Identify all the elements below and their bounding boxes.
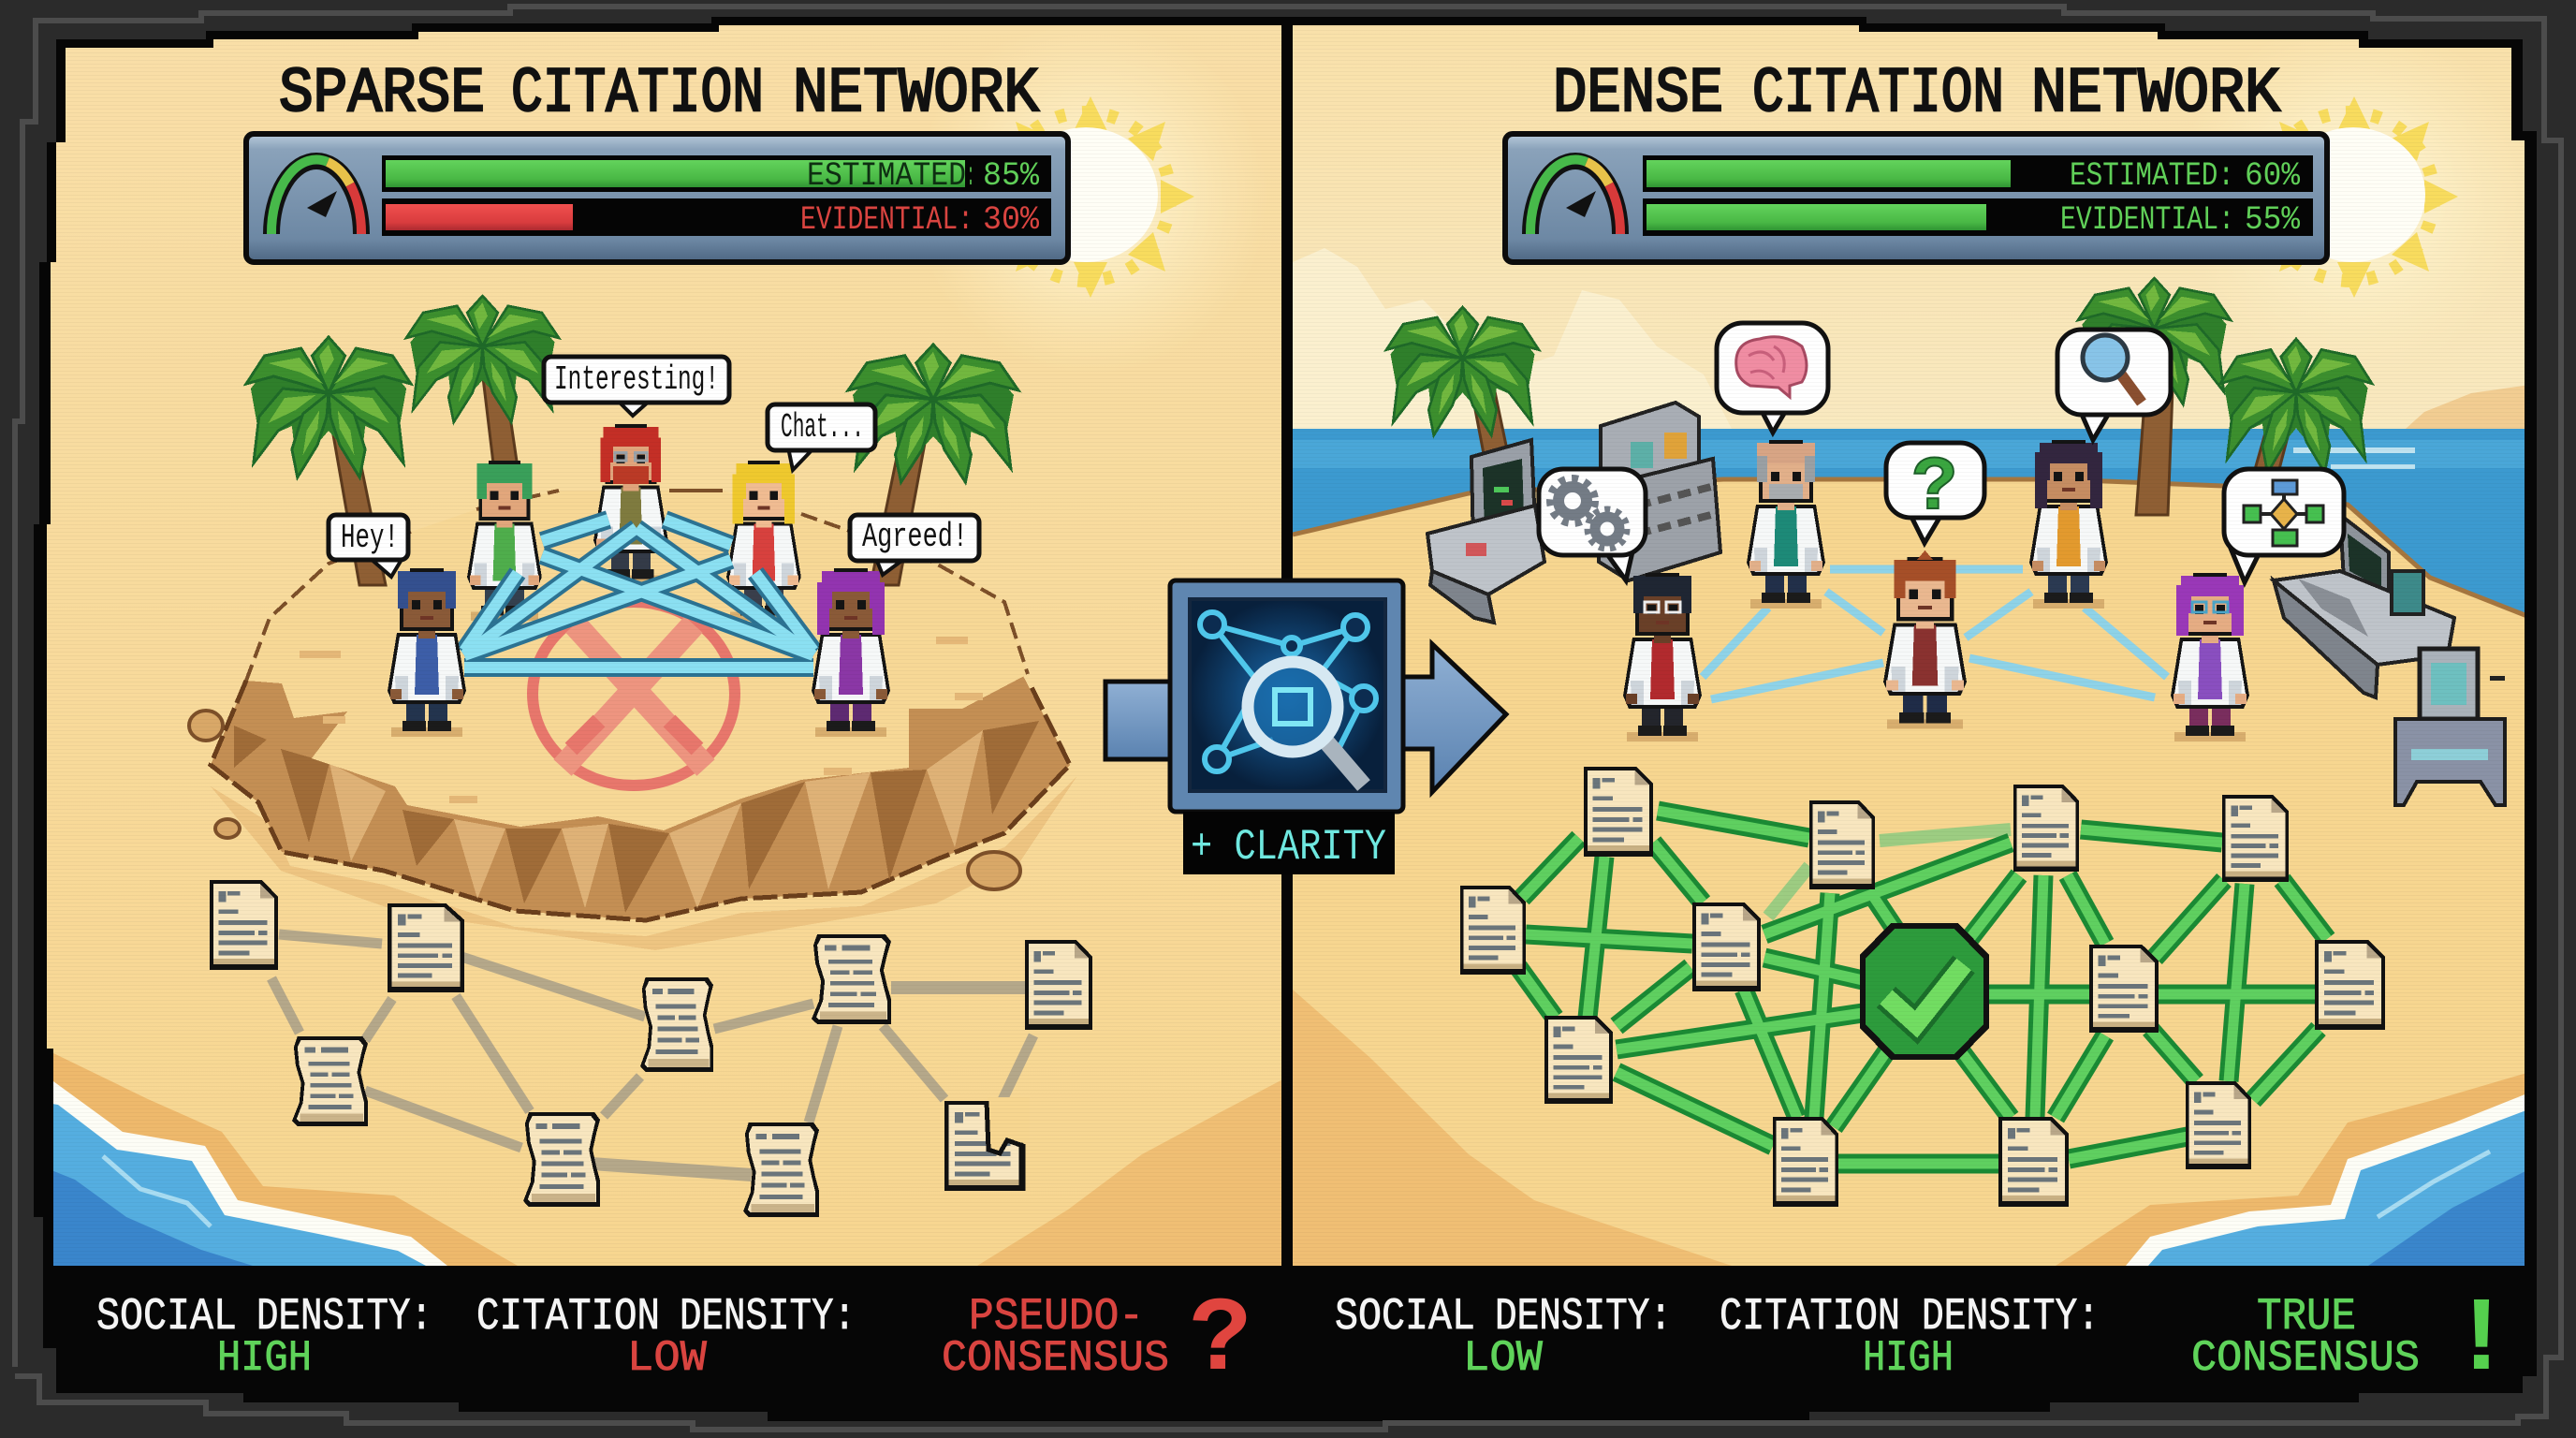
icon bubble: flowchart (2224, 469, 2344, 582)
bar: estimated: : (967, 157, 974, 195)
island with cliffs (211, 491, 1076, 950)
heading: sparse: CITATION (511, 58, 764, 130)
citation density: HIGH (1863, 1334, 1954, 1383)
verdict: true consensus (2191, 1292, 2420, 1383)
bar: evidential (1643, 198, 2313, 239)
verdict: pseudo-consensus (942, 1292, 1169, 1383)
speech bubble: Chat... (768, 404, 875, 470)
citation density (476, 1292, 856, 1383)
lab computer desk right (2274, 515, 2454, 697)
scroll 4 (640, 977, 713, 1072)
verdict: pseudo-consensus: PSEUDO- (969, 1292, 1144, 1343)
document 1 (1584, 767, 1653, 857)
speech bubble: Interesting!: Interesting! (554, 360, 719, 399)
document 8 (2315, 940, 2385, 1030)
icon bubble: question mark (1886, 443, 1984, 543)
social density: DENSITY: (1495, 1292, 1672, 1343)
thick green citation links (1518, 811, 2327, 1164)
heading: dense: CITATION (1752, 58, 2004, 130)
heading: sparse: SPARSE (279, 58, 485, 130)
left water (28, 1100, 426, 1266)
bar: evidential: 30% (983, 201, 1040, 239)
sun: right panel (2176, 19, 2532, 374)
icon: red question mark: ? (1189, 1282, 1252, 1401)
clarity arrow and icon (1105, 580, 1506, 874)
icon bubble: gears (1539, 469, 1646, 580)
scroll 3 (292, 1036, 368, 1126)
document 2 (1809, 800, 1875, 889)
gauge (1530, 160, 1620, 234)
icon: magnifier over network (1170, 580, 1403, 812)
bar: estimated: ESTIMATED: (2070, 157, 2234, 195)
document 3 (2013, 785, 2079, 872)
verdict: true consensus: CONSENSUS (2191, 1334, 2420, 1383)
icon: flowchart (2244, 480, 2323, 546)
red crossed-out emblem on island (533, 602, 735, 785)
palm tree 2 (406, 296, 559, 487)
dark sand bottom right (2056, 1067, 2546, 1266)
citation density: LOW (627, 1334, 707, 1383)
scientist: purple hair, glasses (2171, 573, 2249, 741)
status bar: sparse (96, 1282, 1252, 1401)
scientist: purple hair (812, 568, 890, 737)
right water ripples (2378, 1152, 2490, 1217)
icon: brain (1736, 337, 1807, 397)
bar: estimated: 60% (2245, 157, 2301, 195)
heading: dense: NETWORK (2031, 58, 2280, 130)
bar: evidential: 55% (2245, 201, 2301, 239)
icon bubble: brain (1717, 323, 1828, 433)
bar: evidential: EVIDENTIAL: (2060, 201, 2234, 239)
speech bubble: Agreed!: Agreed! (862, 518, 968, 556)
sea (1293, 429, 2552, 635)
social density: DENSITY: (256, 1292, 432, 1343)
speech bubble: Interesting! (544, 357, 729, 416)
left deep water (28, 1161, 253, 1266)
right deep water (2368, 1161, 2546, 1266)
paper 1 (210, 880, 278, 970)
citation density: CITATION (1720, 1292, 1900, 1343)
dark sand band around left water (28, 1051, 518, 1266)
social density (1335, 1292, 1672, 1383)
arrow head (1401, 644, 1506, 792)
palm tree 1 (246, 337, 411, 585)
verdict: pseudo-consensus: CONSENSUS (942, 1334, 1169, 1383)
palm tree 3 (848, 345, 1018, 585)
social links: dense cyan connections (464, 520, 813, 668)
torn paper 9 (944, 1097, 1030, 1191)
scientist: centre, brown spiky hair (1883, 550, 1967, 729)
verification check badge (1860, 923, 1989, 1060)
scientist: blonde hair (726, 461, 801, 621)
document 5 (1460, 886, 1526, 975)
scientist: dark skin, glasses (1623, 573, 1702, 741)
scientist: blue hair (388, 568, 466, 737)
heading: dense: DENSE (1553, 58, 1723, 130)
speech bubble: Chat...: Chat... (781, 408, 864, 447)
citation density: DENSITY: (680, 1292, 856, 1343)
clarity label: + CLARITY (1191, 823, 1386, 872)
citation density: DENSITY: (1922, 1292, 2100, 1343)
icon: gears (1550, 478, 1627, 549)
scroll 5 (812, 934, 891, 1024)
scientist: dark hair, orange shirt (2029, 440, 2108, 609)
social density: SOCIAL (1335, 1292, 1475, 1343)
speech bubble: Agreed! (850, 515, 979, 575)
beach (1293, 479, 2537, 1273)
palm tree 4 (1386, 307, 1539, 459)
rocks beside island (189, 711, 1020, 889)
faded links (1768, 829, 2011, 917)
dark sand corner bottom right (977, 1077, 1288, 1266)
social density: SOCIAL (96, 1292, 237, 1343)
scientist: older grey hair (1747, 440, 1825, 609)
palm tree 5 (2078, 278, 2231, 515)
paper 6 (1025, 940, 1092, 1030)
bar: estimated (382, 155, 1051, 195)
social density: LOW (1463, 1334, 1543, 1383)
weak social links, pale blue (1703, 569, 2167, 699)
gauge (271, 160, 361, 234)
icon: green exclamation mark: ! (2450, 1282, 2513, 1401)
speech bubble: Hey! (329, 515, 408, 577)
citation density (1720, 1292, 2100, 1383)
sea highlight (2293, 448, 2415, 453)
social density (96, 1292, 432, 1383)
icon bubble: magnifier (2057, 330, 2171, 440)
arrow tail (1105, 682, 1173, 759)
document 9 (1544, 1016, 1613, 1104)
consensus meter panel: dense (1505, 134, 2327, 262)
document 6 (1692, 902, 1761, 991)
bar: estimated (1643, 155, 2313, 195)
heading: sparse: NETWORK (793, 58, 1039, 130)
document 4 (2222, 795, 2289, 882)
document 12 (2186, 1081, 2251, 1169)
clarity label (1183, 812, 1395, 874)
palm tree 6 (2220, 339, 2372, 473)
icon bubble: question mark: ? (1911, 445, 1958, 532)
social density: HIGH (217, 1334, 312, 1383)
dark sand bottom left (1293, 990, 1732, 1266)
speech bubble: Hey!: Hey! (341, 519, 399, 557)
heading: dense (1553, 58, 2280, 130)
heading: sparse (279, 58, 1039, 130)
bar: estimated: ESTIMATED (807, 157, 966, 195)
dense citation network (1460, 767, 2385, 1207)
left water foam (28, 1077, 447, 1266)
scroll 8 (743, 1123, 819, 1217)
sun: left panel (913, 19, 1268, 374)
small lab device (2395, 649, 2505, 805)
left panel: sand background (28, 0, 1288, 1273)
bar: evidential (382, 198, 1051, 239)
lab server machine (1599, 403, 1720, 580)
right water foam (2126, 1086, 2546, 1266)
sea lighter band (1293, 440, 2552, 468)
right water (2148, 1103, 2546, 1266)
sparse grey links (271, 934, 1033, 1175)
paper 2 (388, 903, 464, 992)
far sand dune (2406, 384, 2537, 429)
citation density: CITATION (476, 1292, 660, 1343)
document 10 (1773, 1117, 1838, 1207)
verdict: true consensus: TRUE (2257, 1292, 2356, 1343)
document 7 (2089, 945, 2159, 1033)
consensus meter panel: sparse (246, 134, 1068, 262)
sparse citation network (210, 880, 1092, 1217)
lab computer desk left (1427, 440, 1544, 623)
status bar: dense (1335, 1282, 2513, 1401)
scientist: green hair (467, 461, 542, 621)
bar: estimated: 85% (983, 157, 1040, 195)
beach shore line (1293, 479, 2537, 620)
right panel: sky, sea and beach background (1293, 0, 2552, 1273)
left water ripples (103, 1156, 211, 1226)
clouds (1293, 248, 1732, 429)
document 11 (1998, 1117, 2069, 1207)
scroll 7 (523, 1112, 600, 1207)
icon: magnifier (2083, 335, 2142, 403)
bar: evidential: EVIDENTIAL: (800, 201, 973, 239)
scientist: red hair and beard (593, 424, 668, 584)
